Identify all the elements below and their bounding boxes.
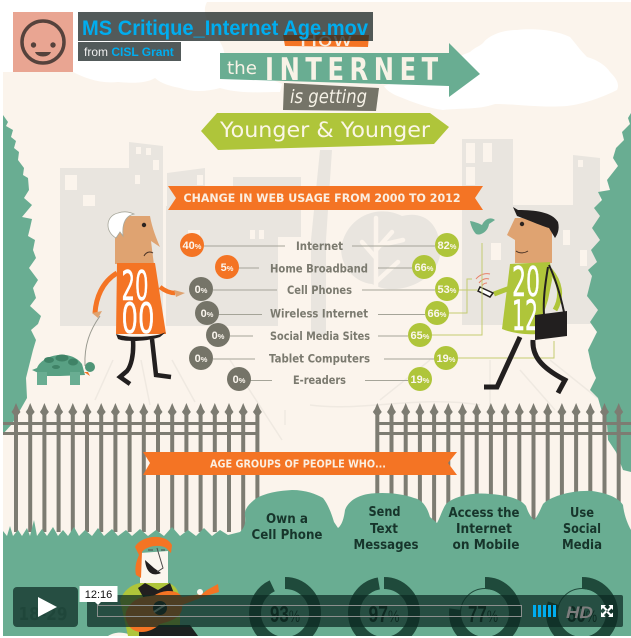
bush heading: Send Text Messages: Send (368, 504, 400, 520)
timecode tooltip: 12:16 (85, 589, 112, 601)
row: Internet: 82% (438, 240, 457, 252)
banner: Younger & Younger: Younger & Younger (219, 118, 430, 142)
bush heading: Use Social Media (562, 505, 602, 553)
row: E-readers (227, 367, 432, 391)
row: Social Media Sites (206, 323, 432, 347)
right tree (587, 113, 631, 472)
old man 2000 with turtle: 00 (122, 294, 154, 343)
ribbon: change in web usage (168, 186, 483, 210)
bush heading: Send Text Messages (354, 504, 418, 553)
street lines (95, 360, 600, 440)
connector lines (432, 243, 554, 358)
row: Cell Phones: 53% (438, 284, 457, 296)
arrow: the INTERNET (220, 43, 480, 97)
guitarist hand (197, 589, 203, 595)
ribbon: change in web usage: CHANGE IN WEB USAGE FROM 2000 TO 2012 (184, 191, 460, 205)
phone (478, 287, 493, 297)
video control overlay (13, 586, 623, 627)
row lines (203, 246, 435, 380)
row: Home Broadband: 5% (221, 262, 234, 274)
timecode tooltip (80, 586, 118, 605)
right fence (373, 403, 631, 532)
donut: 80%: 80% (567, 601, 597, 627)
young man 2012 with bag: 12 (512, 291, 538, 340)
row: Tablet Computers: Tablet Computers (269, 352, 370, 366)
young man legs (484, 337, 565, 393)
white ground patch (108, 633, 132, 636)
bag strap and bag (544, 265, 564, 315)
donut: 97% (354, 583, 414, 638)
byline (78, 42, 181, 61)
guitarist (108, 537, 219, 636)
guitarist face (145, 560, 161, 574)
row: Tablet Computers: 19% (437, 353, 456, 365)
banner: Younger & Younger (201, 113, 449, 150)
old man neck and head (115, 216, 160, 265)
bush heading: Use Social Media: Use (570, 505, 594, 521)
row: Home Broadband: 66% (415, 262, 434, 274)
row: Internet (180, 233, 459, 257)
progress bar panel (87, 595, 623, 627)
bush heading: Access the Internet on Mobile: Access the (448, 505, 520, 521)
row: Cell Phones: Cell Phones (287, 283, 352, 297)
bush heading: Access the Internet on Mobile: on Mobile (452, 537, 520, 553)
age label 18-29: 18-29 (18, 604, 68, 625)
volume meter (533, 605, 556, 617)
donut: 77% (455, 583, 515, 638)
bush heading: Own a Cell Phone: Cell Phone (252, 527, 322, 543)
row: Tablet Computers: 0% (195, 353, 208, 365)
ground and bushes (3, 490, 631, 638)
bush heading: Send Text Messages: Text (370, 521, 398, 537)
bush heading: Send Text Messages: Messages (354, 537, 418, 553)
old man 2000 with turtle: 20 (122, 262, 148, 310)
row: Home Broadband (215, 255, 436, 279)
young man arm (494, 270, 560, 310)
bare tree (360, 216, 405, 286)
row: Home Broadband: Home Broadband (270, 262, 368, 276)
row: Wireless Internet: 0% (201, 308, 214, 320)
turtle (32, 354, 95, 385)
guitarist head (140, 551, 168, 583)
young man shirt (502, 262, 552, 334)
row: Internet: 40% (183, 240, 202, 252)
bird (470, 218, 495, 235)
play button (13, 587, 78, 627)
usage rows (180, 233, 459, 391)
donut: 93% (255, 583, 315, 638)
bush heading: Use Social Media: Social (563, 521, 601, 537)
guitarist hair (135, 537, 172, 578)
arrow: the INTERNET: the (227, 58, 257, 79)
white clouds (3, 2, 618, 110)
city skyline (60, 139, 600, 335)
bush heading: Use Social Media: Media (562, 537, 602, 553)
banner: is getting: is getting (290, 86, 367, 108)
row: Social Media Sites: 0% (212, 330, 225, 342)
old man shirt (116, 263, 166, 334)
row: Cell Phones (189, 277, 459, 301)
HD badge: HD (566, 603, 593, 622)
left fence (3, 403, 262, 532)
ribbon: age groups: AGE GROUPS OF PEOPLE WHO... (210, 458, 386, 470)
row: Cell Phones: 0% (195, 284, 208, 296)
row: E-readers: 19% (411, 374, 430, 386)
donut: 97%: 97% (368, 601, 400, 627)
old man arms (95, 273, 117, 313)
old man 2000 with turtle (32, 212, 185, 385)
wifi waves (476, 274, 490, 286)
row: Tablet Computers (189, 346, 458, 370)
bush heading: Access the Internet on Mobile: Internet (456, 521, 512, 537)
row: Social Media Sites: Social Media Sites (270, 329, 370, 343)
guitar (126, 584, 219, 632)
guitarist trousers (139, 625, 198, 636)
donut: 80% (552, 583, 612, 638)
bush heading: Access the Internet on Mobile (448, 505, 520, 553)
ribbon: How (283, 35, 369, 47)
ribbon: age groups (143, 452, 457, 475)
title ribbons (201, 30, 480, 150)
guitarist collar (138, 583, 175, 602)
row: Internet: Internet (296, 239, 343, 253)
avatar (13, 12, 73, 72)
row: Wireless Internet: Wireless Internet (270, 306, 368, 320)
arrow: the INTERNET: INTERNET (265, 51, 438, 88)
row: E-readers: 0% (233, 374, 246, 386)
donut: 77%: 77% (468, 601, 498, 627)
leash (85, 316, 100, 366)
donut: 93%: 93% (270, 601, 300, 627)
old man legs (120, 339, 171, 384)
guitarist shirt and body (120, 583, 180, 636)
video header overlay (13, 12, 373, 72)
bush heading: Own a Cell Phone: Own a (266, 511, 308, 527)
fullscreen icon (601, 605, 613, 617)
row: Wireless Internet: 66% (428, 308, 447, 320)
young man 2012 with bag (432, 207, 567, 393)
young man head and hair (507, 218, 552, 263)
row: Social Media Sites: 65% (411, 330, 430, 342)
row: E-readers: E-readers (293, 373, 346, 387)
row: Wireless Internet (195, 301, 449, 325)
young man 2012 with bag: 20 (512, 258, 540, 306)
byline: from CISL Grant (84, 45, 174, 59)
left tree (3, 115, 41, 434)
ribbon: How: How (300, 30, 352, 51)
bush heading: Own a Cell Phone (252, 511, 322, 543)
video title: MS Critique_Internet Age.mov (82, 17, 368, 40)
